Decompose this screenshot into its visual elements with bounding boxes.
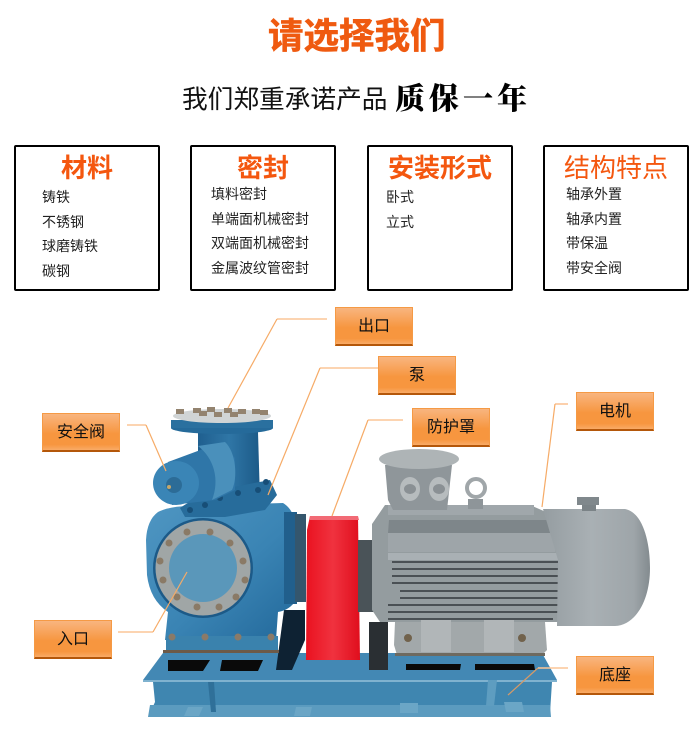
list: structure	[566, 186, 622, 276]
label: guard	[412, 408, 490, 447]
heading: structure: 结构特点	[564, 153, 668, 183]
outlet neck and flange	[171, 407, 277, 517]
label: inlet	[34, 620, 112, 659]
label: safety valve: 安全阀	[57, 424, 105, 441]
subtitle: one-year warranty promise	[182, 82, 531, 116]
label: safety valve	[42, 413, 120, 452]
heading: installation: 安装形式	[388, 153, 492, 183]
title: 请选择我们	[268, 16, 446, 56]
panel: installation	[367, 145, 513, 291]
safety valve	[153, 442, 235, 505]
list: seals: 双端面机械密封	[211, 235, 309, 251]
leader lines	[118, 319, 568, 695]
label: guard: 防护罩	[427, 419, 475, 436]
list: structure: 带安全阀	[566, 260, 622, 276]
panel: materials	[14, 145, 160, 291]
list: installation	[386, 189, 414, 230]
subtitle: one-year warranty promise: 我们郑重承诺产品	[182, 86, 388, 114]
label: outlet: 出口	[358, 318, 390, 335]
fan cover	[543, 509, 650, 626]
list: installation: 卧式	[386, 189, 414, 205]
list: seals	[211, 186, 309, 276]
red guard	[306, 516, 360, 660]
terminal box	[379, 449, 459, 510]
inlet flange	[153, 518, 253, 618]
subtitle: one-year warranty promise: 质保一年	[395, 83, 531, 116]
list: seals: 金属波纹管密封	[211, 260, 309, 276]
heading: materials: 材料	[61, 153, 113, 183]
label: base	[576, 656, 654, 695]
panel: seals	[190, 145, 336, 291]
eye bolt	[467, 479, 485, 509]
list: materials	[42, 189, 98, 279]
list: materials: 球磨铸铁	[42, 238, 98, 254]
motor feet	[394, 620, 547, 656]
label: pump: 泵	[409, 367, 425, 384]
list: installation: 立式	[386, 214, 414, 230]
base frame	[143, 610, 557, 717]
motor	[358, 449, 650, 656]
list: seals: 单端面机械密封	[211, 211, 309, 227]
pump body	[146, 503, 306, 653]
list: materials: 不锈钢	[42, 214, 84, 230]
list: structure: 轴承内置	[566, 211, 622, 227]
label: pump	[378, 356, 456, 395]
label: outlet	[335, 307, 413, 346]
label: motor: 电机	[599, 403, 631, 420]
panel: structure	[543, 145, 689, 291]
list: seals: 填料密封	[211, 186, 267, 202]
list: structure: 轴承外置	[566, 186, 622, 202]
list: materials: 铸铁	[42, 189, 70, 205]
label: inlet: 入口	[57, 631, 89, 648]
heading: seals: 密封	[237, 153, 289, 183]
label: motor	[576, 392, 654, 431]
list: materials: 碳钢	[42, 263, 70, 279]
list: structure: 带保温	[566, 235, 608, 251]
label: base: 底座	[599, 667, 631, 684]
